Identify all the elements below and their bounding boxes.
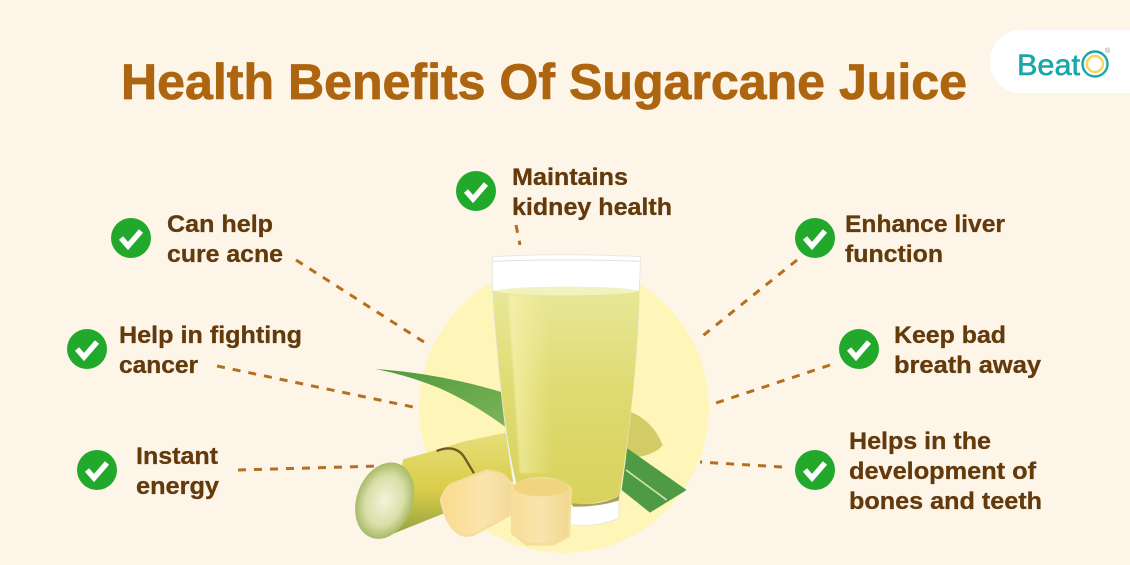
benefit: helps in the development of bones and teeth: bones and teeth — [849, 488, 1042, 515]
benefit: can help cure acne — [111, 211, 283, 268]
benefit: instant energy: Instant — [136, 443, 218, 470]
cane left piece — [383, 432, 517, 538]
leaf lower right — [622, 448, 687, 513]
benefit: helps in the development of bones and teeth — [795, 428, 1042, 515]
benefit: helps in the development of bones and teeth: development of — [849, 458, 1037, 485]
benefit: maintains kidney health — [456, 164, 672, 221]
benefit: can help cure acne: cure acne — [167, 241, 283, 268]
benefit: help in fighting cancer — [67, 322, 302, 379]
cane chunk right — [512, 478, 571, 544]
benefit: help in fighting cancer: Help in fighting — [119, 322, 302, 349]
background circle — [419, 263, 709, 553]
benefit: keep bad breath away: Keep bad — [894, 322, 1006, 349]
benefit: can help cure acne: Can help — [167, 211, 273, 238]
cane chunk left — [441, 471, 513, 535]
cane node — [437, 448, 474, 473]
logo: BeatO — [990, 30, 1130, 93]
illustration: sugarcane juice glass and cane — [345, 255, 687, 547]
title: Health Benefits Of Sugarcane Juice — [121, 54, 967, 110]
benefit: keep bad breath away: breath away — [894, 352, 1042, 379]
benefit: instant energy — [77, 443, 220, 500]
benefit: help in fighting cancer: cancer — [119, 352, 198, 379]
cane right end — [623, 411, 663, 457]
logo: BeatO: ® — [1105, 47, 1111, 55]
benefit: maintains kidney health: kidney health — [512, 194, 672, 221]
logo: BeatO: Beat — [1017, 49, 1081, 82]
benefit: maintains kidney health: Maintains — [512, 164, 628, 191]
leaf upper left — [375, 369, 505, 427]
benefit: helps in the development of bones and teeth: Helps in the — [849, 428, 991, 455]
connector lines — [217, 225, 830, 470]
benefit: enhance liver function: Enhance liver — [845, 211, 1005, 238]
benefit: enhance liver function — [795, 211, 1005, 268]
benefit: keep bad breath away — [839, 322, 1042, 379]
benefit: instant energy: energy — [136, 473, 220, 500]
glass — [492, 255, 641, 525]
benefit: enhance liver function: function — [845, 241, 943, 268]
cane cut face — [345, 454, 424, 547]
